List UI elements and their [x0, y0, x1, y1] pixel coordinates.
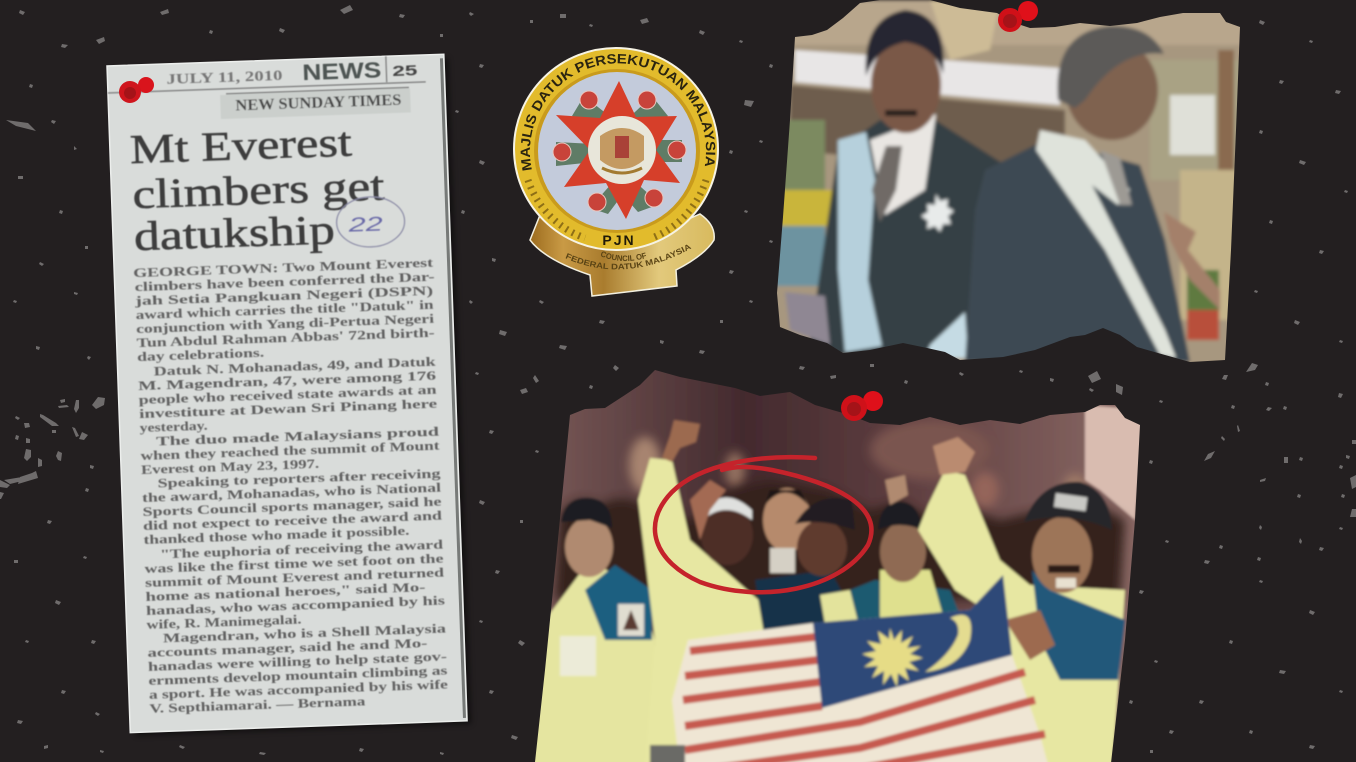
article body: was like the first time we set foot on the — [144, 551, 444, 576]
back crowd — [555, 480, 1125, 600]
panel: photo of two men with sashes — [770, 0, 1250, 370]
panel: team photo with Malaysian flag — [525, 360, 1145, 762]
article body: Tun Abdul Rahman Abbas' 72nd birth- — [136, 325, 435, 350]
article body: V. Septhiamarai. — Bernama — [149, 693, 366, 716]
article body: hanadas were willing to help state gov- — [148, 649, 447, 674]
article body: thanked those who made it possible. — [143, 523, 410, 547]
crest medallion — [588, 116, 656, 184]
masthead: JULY 11, 2010 — [166, 68, 283, 88]
article body: wife, R. Manimegalai. — [146, 612, 302, 632]
emblem: Majlis Datuk Persekutuan Malaysia badge — [513, 47, 719, 297]
roses — [553, 91, 686, 214]
article body: the award, Mohanadas, who is National — [142, 480, 442, 505]
article body: investiture at Dewan Sri Pinang here — [139, 396, 438, 421]
article body: accounts manager, said he and Mo- — [147, 635, 428, 660]
pin: portrait photo — [998, 1, 1038, 32]
room background — [525, 360, 1145, 762]
ribbon text: COUNCIL OF — [601, 252, 646, 262]
article body: Everest on May 23, 1997. — [141, 456, 319, 477]
photo background — [777, 42, 1240, 362]
headline: Mt Everest — [129, 118, 353, 172]
article body: people who received state awards at an — [138, 382, 438, 407]
masthead — [107, 55, 427, 123]
wreath strokes on ring — [528, 180, 706, 238]
article body: "The euphoria of receiving the award — [160, 537, 444, 561]
headline: climbers get — [132, 162, 386, 217]
ring title: MAJLIS DATUK PERSEKUTUAN MALAYSIA — [520, 54, 716, 171]
flag sun — [862, 628, 923, 687]
masthead: NEW SUNDAY TIMES — [235, 92, 402, 115]
article body: yesterday. — [139, 418, 208, 435]
masthead: NEWS — [302, 57, 382, 85]
article body: summit of Mount Everest and returned — [145, 565, 445, 590]
flag crescent — [925, 615, 971, 672]
pin: team photo — [841, 391, 883, 421]
article body — [132, 255, 450, 716]
article body: Sports Council sports manager, said he — [142, 494, 442, 519]
article body: award which carries the title "Datuk" in — [135, 297, 435, 322]
ribbon text: FEDERAL DATUK MALAYSIA — [566, 244, 692, 270]
inner disc — [538, 72, 696, 230]
headline — [129, 117, 387, 259]
pin: newspaper — [119, 77, 154, 103]
article body: jah Setia Pangkuan Negeri (DSPN) — [133, 283, 433, 308]
article body: Speaking to reporters after receiving — [157, 466, 441, 490]
handwritten 22 circled: 22 — [347, 213, 383, 237]
team member centre right — [850, 475, 962, 630]
team member right, fist raised — [918, 437, 1125, 762]
PJN lettering: PJN — [602, 232, 636, 248]
team member raised arm — [636, 418, 766, 747]
article body: a sport. He was accompanied by his wife — [149, 676, 448, 702]
article body: M. Magendran, 47, were among 176 — [138, 368, 437, 393]
paper sheet — [107, 54, 467, 733]
article body: The duo made Malaysians proud — [156, 424, 440, 449]
article body: home as national heroes," said Mo- — [145, 579, 426, 604]
article body: when they reached the summit of Mount — [140, 438, 441, 463]
ribbon — [530, 214, 714, 296]
wall lights — [629, 437, 661, 493]
article body: ernments develop mountain climbing as — [148, 662, 448, 688]
headline: datukship — [133, 206, 336, 259]
team member far left — [530, 498, 655, 762]
red star — [556, 81, 680, 219]
article body: climbers have been conferred the Dar- — [134, 269, 435, 294]
masthead: 25 — [392, 62, 418, 80]
star medal — [921, 194, 954, 232]
article body: GEORGE TOWN: Two Mount Everest — [133, 255, 434, 280]
left man — [785, 10, 1005, 358]
handwritten 22 circled — [336, 196, 405, 248]
panel: newspaper clipping — [107, 54, 471, 735]
article body: hanadas, who was accompanied by his — [146, 593, 445, 618]
Malaysian flag — [672, 575, 1050, 762]
article body: conjunction with Yang di-Pertua Negeri — [136, 311, 435, 336]
wall pillar — [1085, 405, 1145, 520]
article body: did not expect to receive the award and — [143, 508, 443, 533]
red hand-drawn circle — [655, 457, 871, 592]
central climbers — [690, 480, 860, 640]
right man — [965, 26, 1220, 362]
outer ring — [514, 48, 718, 250]
article body: Magendran, who is a Shell Malaysia — [163, 620, 447, 645]
article body: day celebrations. — [137, 345, 264, 364]
article body: Datuk N. Mohanadas, 49, and Datuk — [153, 354, 437, 379]
